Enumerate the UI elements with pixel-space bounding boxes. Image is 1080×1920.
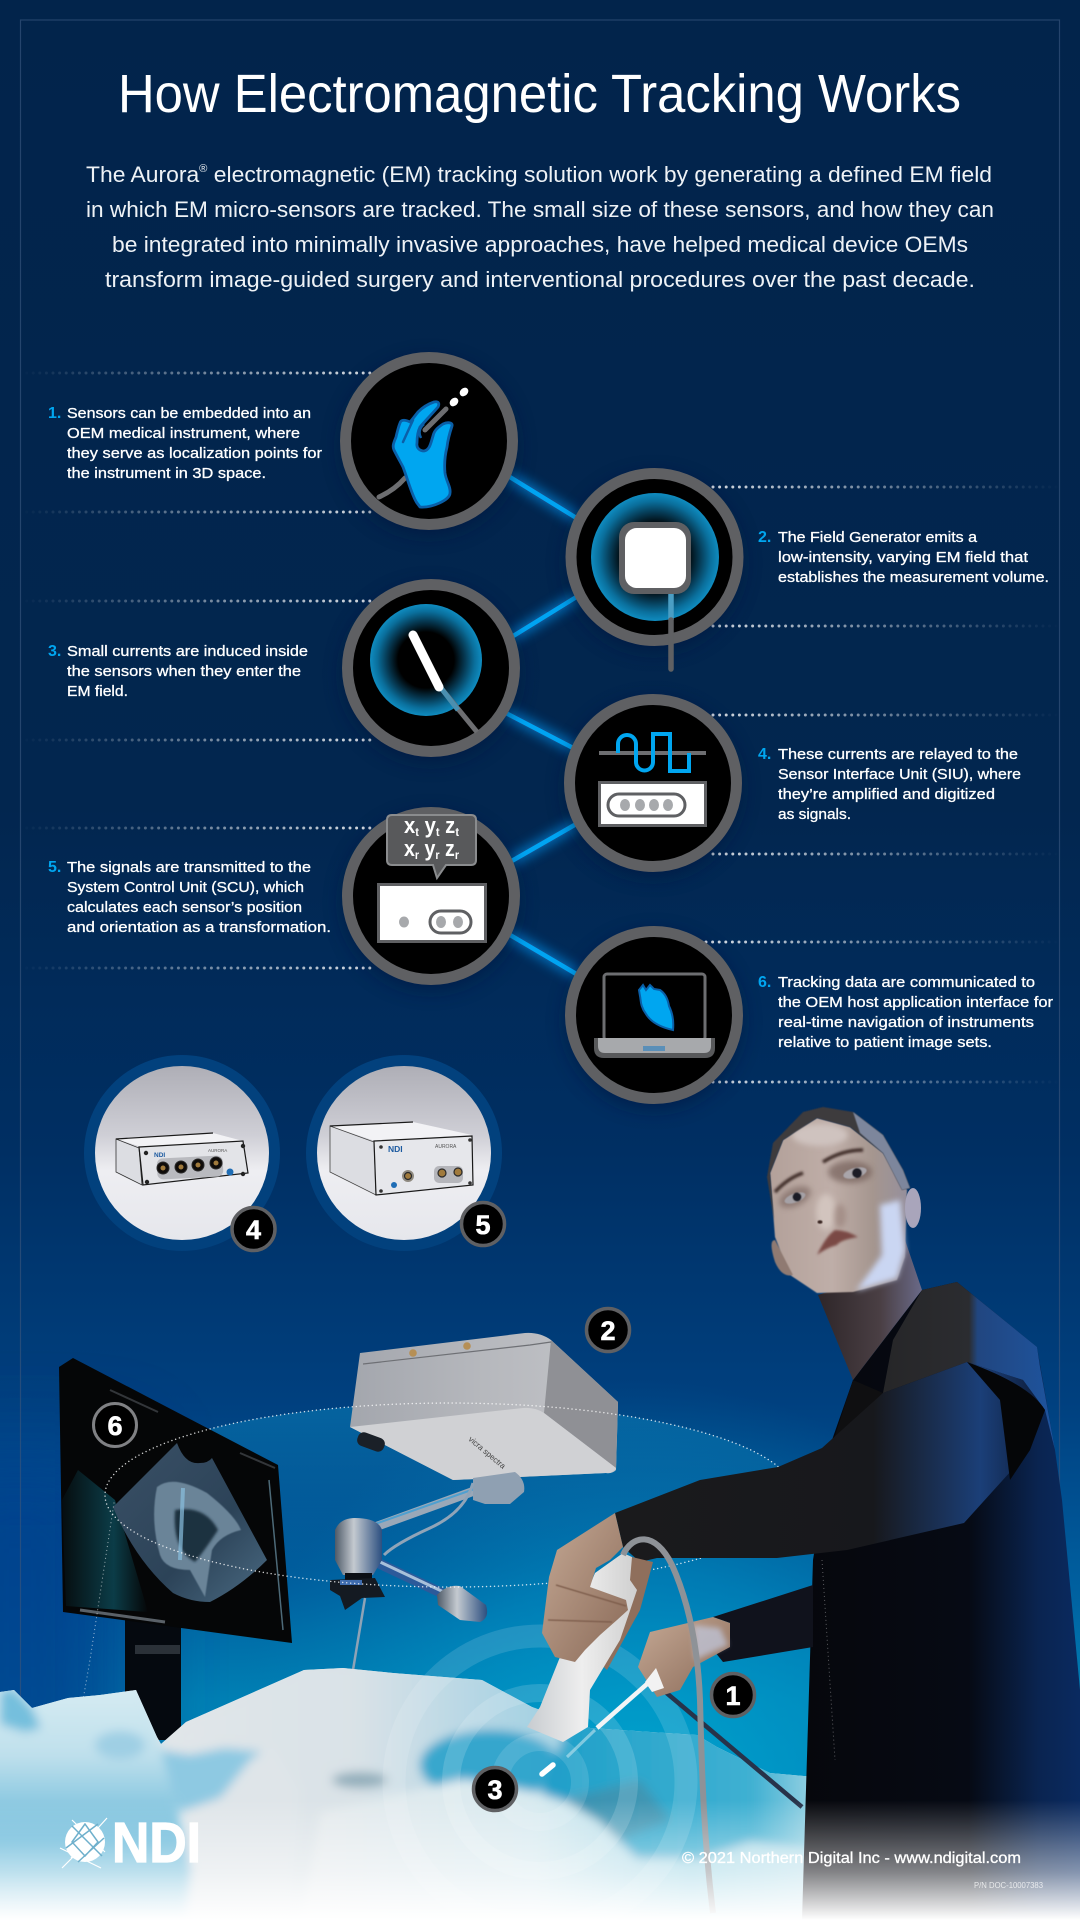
step 5 icon: system control unit: t xyxy=(415,825,419,839)
product photo: system control unit: NDI xyxy=(388,1144,403,1154)
EM field volume dotted outline xyxy=(83,1403,795,1700)
articulated mounting arm xyxy=(330,1472,524,1775)
callout badge 6: 6 xyxy=(107,1411,123,1441)
step 2 text xyxy=(758,529,1049,586)
intro text: be integrated into minimally invasive approaches, have helped medical device OEMs xyxy=(112,232,968,257)
intro text xyxy=(86,162,994,292)
step 2 text: 2. xyxy=(758,529,771,546)
callout badge 4: 4 xyxy=(246,1215,261,1245)
bottom white fade xyxy=(0,1800,1080,1920)
connector lines between steps xyxy=(502,474,578,975)
callout badge 1: 1 xyxy=(725,1681,741,1711)
part number: P/N DOC-10007383 xyxy=(974,1881,1044,1890)
step 1 icon: gloved hand xyxy=(346,358,512,524)
step 2 text: The Field Generator emits a xyxy=(778,529,978,546)
field generator: vicra spectra xyxy=(467,1435,508,1471)
step 3 text: EM field. xyxy=(67,683,128,700)
circle soft shadows xyxy=(340,358,743,1110)
step 4 text: 4. xyxy=(758,746,771,763)
step 1 text: the instrument in 3D space. xyxy=(67,465,266,482)
callout badge 3 xyxy=(474,1768,516,1810)
copyright: © 2021 Northern Digital Inc - www.ndigital.com xyxy=(682,1850,1021,1867)
step 5 icon: system control unit: y xyxy=(419,813,437,838)
NDI logo: NDI xyxy=(112,1811,201,1875)
step 3 text: Small currents are induced inside xyxy=(67,643,308,660)
intro text: in which EM micro-sensors are tracked. The small size of these sensors, and how they can xyxy=(86,197,994,222)
hands, probe and instrument xyxy=(527,1513,802,1913)
step 5 icon: system control unit: t xyxy=(436,825,440,839)
step 5 icon: system control unit: z xyxy=(440,813,455,838)
intro text: electromagnetic (EM) tracking solution work by generating a defined EM field xyxy=(207,162,992,187)
step 5 icon: system control unit: r xyxy=(435,848,440,862)
step 1 text: they serve as localization points for xyxy=(67,445,322,462)
step 4 text: they’re amplified and digitized xyxy=(778,786,995,803)
step 6 icon: laptop with heart xyxy=(570,932,738,1098)
step 1 text xyxy=(48,405,322,482)
patient body xyxy=(0,1660,820,1920)
step 6 text: real-time navigation of instruments xyxy=(778,1014,1034,1031)
step 4 text: Sensor Interface Unit (SIU), where xyxy=(778,766,1021,783)
callout badge 3: 3 xyxy=(487,1775,503,1805)
step 6 text xyxy=(758,974,1053,1051)
EM field rings around sensor xyxy=(394,1636,686,1920)
step 6 text: 6. xyxy=(758,974,771,991)
step 5 icon: system control unit: t xyxy=(455,825,459,839)
step 1 text: Sensors can be embedded into an xyxy=(67,405,311,422)
product photo: sensor interface unit: AURORA xyxy=(208,1148,227,1153)
callout badge 4 xyxy=(232,1208,275,1250)
step 5 text: The signals are transmitted to the xyxy=(67,859,311,876)
step 3 text: the sensors when they enter the xyxy=(67,663,301,680)
step 5 text: and orientation as a transformation. xyxy=(67,919,331,936)
step 3 icon: sensor xyxy=(348,584,514,752)
step 3 text: 3. xyxy=(48,643,61,660)
step 5 icon: system control unit: r xyxy=(415,848,419,862)
step 2 text: low-intensity, varying EM field that xyxy=(778,549,1029,566)
step 1 text: 1. xyxy=(48,405,61,422)
callout badge 6 xyxy=(94,1404,136,1446)
product photo: sensor interface unit xyxy=(84,1055,280,1251)
step 4 text: These currents are relayed to the xyxy=(778,746,1018,763)
patient monitor xyxy=(59,1358,292,1740)
title: How Electromagnetic Tracking Works xyxy=(118,64,961,124)
woman clinician xyxy=(615,1107,1080,1920)
step 1 text: OEM medical instrument, where xyxy=(67,425,300,442)
step 5 text: System Control Unit (SCU), which xyxy=(67,879,304,896)
step 5 text xyxy=(48,859,331,936)
callout badge 2 xyxy=(586,1308,630,1352)
step 2 icon: field generator xyxy=(571,474,738,669)
step 4 icon: sensor interface unit xyxy=(570,700,736,866)
step 4 text xyxy=(758,746,1021,823)
callout badge 1 xyxy=(712,1674,754,1716)
callout badge 5: 5 xyxy=(475,1210,491,1240)
step 6 text: Tracking data are communicated to xyxy=(778,974,1035,991)
step 6 text: relative to patient image sets. xyxy=(778,1034,992,1051)
product photo: sensor interface unit: NDI xyxy=(154,1152,165,1159)
step 5 text: calculates each sensor’s position xyxy=(67,899,302,916)
intro text: ® xyxy=(199,163,207,175)
step 6 text: the OEM host application interface for xyxy=(778,994,1053,1011)
step 3 text xyxy=(48,643,308,700)
step 4 text: as signals. xyxy=(778,806,851,823)
intro text: The Aurora xyxy=(86,162,197,187)
callout badge 5 xyxy=(462,1202,504,1246)
step 5 icon: system control unit: r xyxy=(455,848,459,862)
product photo: system control unit xyxy=(306,1055,502,1251)
step 5 icon: system control unit: x xyxy=(404,836,416,861)
intro text: transform image-guided surgery and interventional procedures over the past decade. xyxy=(105,267,975,292)
step 5 icon: system control unit: x xyxy=(404,813,416,838)
step 5 icon: system control unit: y xyxy=(419,836,436,861)
product photo: system control unit: AURORA xyxy=(435,1144,457,1150)
callout badge 2: 2 xyxy=(600,1316,616,1346)
step 5 icon: system control unit xyxy=(348,812,514,980)
field generator xyxy=(350,1333,618,1480)
step 2 text: establishes the measurement volume. xyxy=(778,569,1049,586)
EM field volume fill xyxy=(105,1403,795,1587)
step 5 text: 5. xyxy=(48,859,61,876)
NDI logo xyxy=(60,1811,201,1875)
step 5 icon: system control unit: z xyxy=(440,836,455,861)
